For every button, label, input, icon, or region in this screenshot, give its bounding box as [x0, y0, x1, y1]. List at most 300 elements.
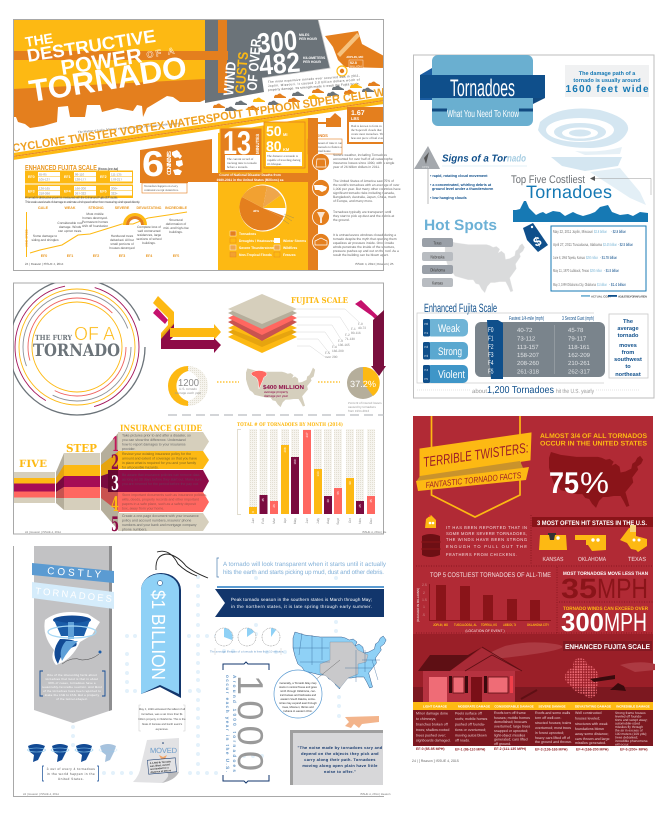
bar chart title: TOTAL # OF TORNADOES BY MONTH (2014) [237, 422, 343, 428]
dashed divider [168, 414, 384, 416]
footer fact: 1200 tornadoes: 1,200 Tornadoes [487, 385, 554, 396]
EF speed labels: EF-2 (111-135 MPH) [494, 747, 526, 751]
leader lines and scale labels: over 200 [325, 355, 338, 359]
leader lines and scale labels: F-0 [358, 322, 363, 326]
step 1 arrow [112, 432, 209, 456]
bar chart: tornadoes by month: July [316, 518, 320, 524]
step 4 arrow: 4 [111, 492, 119, 516]
damage descriptions: in forest uprooted; [535, 731, 564, 735]
bar chart: tornadoes by month: Oct [348, 518, 352, 523]
box: costliest list: $250 million [586, 255, 598, 260]
table: wind speeds [475, 316, 605, 379]
map: Missouri with Joplin callout [325, 31, 384, 76]
donut: 1200 tornadoes [168, 366, 208, 406]
sidebar text: It is untrue/severe windows closed during a [333, 233, 396, 237]
list: signs: • rapid, rotating cloud movement [430, 174, 488, 178]
heading: top five costliest tornadoes: Tornadoes [526, 182, 612, 202]
bar chart: tornadoes by month: Apr [283, 517, 287, 523]
pie legend: Tornadoes [239, 232, 256, 236]
label: five: FIVE [19, 459, 47, 470]
warning sign icon: warning [422, 166, 429, 168]
title: OF A [146, 46, 175, 60]
bar chart: tornadoes by month: Mar [272, 517, 276, 524]
scene: house and tree [413, 634, 655, 702]
banner: peak tornado season [215, 586, 384, 617]
step 1 arrow: you can show the difference. Understand [122, 438, 186, 442]
text: chickens: SOME MORE SEVERE TORNADOES, [446, 531, 527, 536]
wind gusts rotated text: OF OVER [244, 38, 264, 91]
pills: weak strong violent: Strong [438, 346, 462, 358]
page footers [25, 530, 387, 534]
list: signs: • low hanging clouds [430, 196, 467, 200]
ribbon: costly: COSTLY [47, 566, 102, 581]
title banner: What You Need To Know [447, 109, 520, 120]
box: costliest list: $1 billion [597, 282, 607, 287]
bar chart: tornadoes by month: 180 [293, 459, 297, 465]
heading: top five costliest tornadoes: Top Five Costliest [511, 174, 585, 186]
bar chart: top 5 costliest: 2.5 [422, 583, 427, 587]
line chart: wind speed by EF rating: debarked. All but [110, 238, 134, 242]
bar chart: tornadoes by month: Jun [305, 518, 309, 523]
title: the fury of a tornado: TORNADO [33, 341, 120, 361]
wind speed figures: PER HOUR [303, 60, 321, 64]
down arrow [355, 300, 386, 376]
icon: moved notice [133, 738, 179, 783]
sidebar text [333, 153, 401, 257]
text block in bookmark: of the tunnel-shaped. [56, 697, 88, 701]
pills: weak strong violent: F1 [424, 331, 428, 335]
text block in bookmark: of the tornadoes have been reported to [43, 689, 101, 693]
clocks: The average lifespan of a tornado is less than 10 minutes. [210, 650, 284, 654]
callout circle: tornado alley: starts in central Texas and goes [279, 686, 318, 689]
step 1 arrow: how to report damages to your insurance [122, 442, 186, 446]
table: wind speeds: F2 [488, 344, 494, 351]
tornado swirl illustration [538, 108, 646, 205]
banner: natural disaster deaths [217, 173, 284, 182]
box: costliest list: - $2.8 billion [611, 229, 626, 234]
table: EF wind speed boxes: 105-137 [39, 178, 50, 182]
buttons: hot spot states: Texas [434, 240, 442, 246]
text block in bookmark: One of the interesting facts about [47, 673, 97, 677]
callout circle: tornado alley: times may expand east through [279, 702, 317, 705]
figure: 1000 tornadoes: occur each year in the U.S. [225, 675, 230, 772]
footer fact: 1200 tornadoes [417, 385, 640, 396]
text: most expensive tornado: property damage. Its strength made it reach the Fujita Scale. [268, 82, 360, 92]
leader lines and scale labels: F-3 [338, 339, 343, 343]
box: average direction: average [617, 326, 639, 332]
quote box: noise to offer." [324, 769, 356, 774]
step 4 arrow [111, 492, 209, 516]
line chart: wind speed by EF rating: well constructed [138, 229, 161, 233]
table: wind speeds: 261-318 [517, 368, 540, 376]
skyline [513, 201, 648, 222]
callout circle: tornado alley: tral Kansas and Nebraska and [280, 694, 317, 697]
line chart: wind speed by EF rating: STRONG [88, 206, 104, 210]
pie: 37.2 percent: caused by tornadoes [348, 405, 376, 409]
sidebar text: year of 26 billion dollars in 2011. [333, 165, 380, 169]
icon: chicken in barrel [421, 514, 441, 557]
box: costliest list: April 27, 2011 Tuscaloosa, Alabama [553, 242, 602, 247]
caption: Joplin: The Skyline of Joplin, Missouri stands with the most destructive tornado in history [78, 121, 181, 134]
line chart: wind speed by EF rating: GALE [38, 206, 49, 210]
damage descriptions: houses; mobile homes [494, 716, 530, 720]
line chart: wind speed by EF rating: EF4 [146, 254, 152, 258]
line chart: wind speed by EF rating: sections of school [136, 237, 162, 241]
fact: damage path: tornado is usually around [573, 78, 641, 84]
step 5 arrow: 5 [111, 512, 119, 536]
damage descriptions: trees pushed over; [416, 734, 446, 738]
map: 75 percent: 75 [549, 467, 579, 500]
table: EF wind speed boxes: EF1 [64, 175, 71, 179]
pie legend [230, 231, 306, 257]
line chart: wind speed by EF rating: EF2 [93, 254, 99, 258]
heading: hot spots: Hot Spots [424, 217, 497, 234]
text: chickens: ENOUGH TO PULL OUT THE [446, 544, 527, 549]
line chart: wind speed by EF rating: damage. Winds [59, 225, 81, 229]
sidebar text: accounted for over half of all catastrophe [333, 157, 393, 161]
table: EF wind speed boxes: EF5 [100, 190, 107, 194]
block: 1.67 lbs hail: LBS [351, 116, 359, 121]
note: May 3 1999: tornadoes, was a set more than $1 [141, 713, 183, 716]
damage descriptions: foundations blown [575, 727, 604, 731]
damage descriptions: trees debarked; [615, 736, 638, 740]
fact: 35 MPH: 35 [561, 573, 597, 604]
title: the fury of a tornado [33, 324, 120, 361]
bar chart: tornadoes by month: 9 [251, 511, 255, 513]
sidebar text: insurance losses since 1990, with a single [333, 161, 395, 165]
footer: 24 | [ Reason ] ISSUE 4, 2015 [412, 759, 459, 763]
sidebar text: The United States of America saw 75% of [333, 179, 394, 183]
block: 50 MI 80 KM: 80 [266, 138, 282, 154]
pie legend: Wildfires [283, 246, 297, 250]
block: 50 MI 80 KM: MI [283, 132, 287, 137]
strip: damage categories: MODERATE DAMAGE [458, 704, 490, 708]
box: costliest list: - $1.5 billion [604, 268, 619, 273]
map: United States tornado alley [293, 632, 386, 694]
text: chickens: FEATHERS FROM CHICKENS. [446, 552, 517, 557]
line chart: wind speed by EF rating: small portions of [110, 242, 134, 246]
label: step: STEP [66, 442, 97, 455]
quote box: "The noise made by tornadoes vary and [298, 745, 383, 750]
heading: signs of a tornado: nado [507, 154, 526, 164]
tag: 1 billion: $1 BILLION [147, 590, 168, 680]
table: wind speeds: 40-72 [517, 327, 533, 334]
bar chart: tornadoes by month: May [293, 518, 297, 524]
leader lines and scale labels: 71-130 [345, 337, 355, 341]
bar chart: tornadoes by month: Feb [261, 518, 265, 524]
block: 4 seconds with house icon [308, 113, 342, 154]
fact: 300 MPH: TORNADO WINDS CAN EXCEED OVER [563, 606, 648, 612]
figure: 1000 tornadoes: Around 1000 tornadoes [232, 675, 237, 772]
buttons: hot spot states [422, 238, 453, 287]
pie: 37.2 percent [347, 367, 382, 413]
panel: costly tornadoes [14, 546, 391, 797]
tag: 1 billion [141, 551, 208, 698]
line chart: wind speed by EF rating: DEVASTATING [137, 206, 162, 210]
damage descriptions: cars thrown and large [575, 737, 610, 741]
step 3 arrow: Be aware that insurance policies can remove data [122, 473, 199, 477]
block: 50 MI 80 KM: capable of traveling during [267, 158, 301, 162]
damage descriptions: trees; shallow-rooted [416, 728, 449, 732]
box outline [417, 313, 604, 383]
map: hot spots US [445, 240, 525, 293]
box: costliest list: - $1.78 billion [600, 255, 617, 260]
page footers: ISSUE 4, 2014 | Re [362, 530, 387, 534]
block: 4 seconds with house icon: take a tornado to flatten a [310, 145, 342, 149]
block: 13 minutes: before a tornado. [227, 165, 248, 169]
pie legend: Droughts / Heatwaves [239, 239, 275, 243]
text: 3 out of every 4: in the world happen in the [47, 772, 95, 776]
table: EF wind speed boxes: 322+ [111, 192, 118, 196]
bar chart: top 5 costliest: TOP 5 COSTLIEST TORNADOES OF ALL-TIME [430, 572, 551, 579]
bar chart: tornadoes by month: 99 [348, 481, 352, 485]
table: EF wind speed boxes: EF4 [64, 190, 71, 194]
headline: three quarters [540, 433, 648, 448]
damage descriptions: missiles generated. [575, 741, 606, 745]
wind speed figures: 300 [256, 25, 298, 59]
table: wind speeds: 158-207 [517, 352, 540, 359]
box: costliest list: May 11, 1970 Lubbock, Texas [553, 268, 589, 273]
icon: price tag: $ [531, 233, 544, 250]
table: EF wind speed boxes: 111-135 [111, 172, 122, 176]
donut: 1200 tornadoes: 1200 [178, 378, 199, 389]
block: 50 MI 80 KM: KM [283, 147, 290, 152]
pills: weak strong violent: F3 [424, 354, 428, 358]
dotted dividers [416, 515, 653, 635]
EF speed labels [416, 747, 648, 752]
banner frame [432, 416, 520, 517]
text: fujita description: This scale uses levels of damage to estimate wind speed rather than measuring wind speed directly. [25, 200, 140, 204]
damage descriptions: Peels surface off [455, 712, 482, 716]
block: 6 continents: 6 [142, 143, 164, 184]
callout circle: tornado alley: north through Oklahoma, cen- [280, 690, 316, 693]
block: 50 MI 80 KM: The distance a tornado is [267, 154, 299, 158]
line chart: wind speed by EF rating: houses destroyed [109, 246, 135, 250]
row of small cloud icons [213, 82, 380, 111]
dotted connector [217, 381, 239, 383]
step 1 arrow: 1 [112, 432, 119, 456]
step 5 arrow: Create a one-page document with your insurance [122, 514, 199, 518]
bar chart: tornadoes by month: 26 [272, 504, 276, 508]
pie: 37.2 percent: Percent of insured losses [348, 401, 382, 405]
pills: weak strong violent: Weak [438, 323, 460, 335]
map: Missouri with Joplin callout: BILLION [350, 64, 362, 68]
state: Kansas [539, 533, 567, 563]
pills: weak strong violent: Violent [438, 369, 465, 381]
tree blown over [565, 658, 626, 698]
table: wind speeds: F3 [488, 352, 494, 359]
note: May 3 1999: expensive. [156, 728, 169, 731]
pie: 37.2 percent: from 1994-2013 [348, 409, 370, 413]
concentric rings title graphic [9, 279, 145, 415]
ribbon: tornadoes [32, 582, 114, 609]
footer fact: 1200 tornadoes: hit the U.S. yearly [556, 388, 594, 395]
step 2 arrow: 2 [111, 450, 119, 474]
map: $400 million: $400 MILLION [263, 384, 304, 391]
sidebar text: result the building can be blown apart. [333, 253, 389, 257]
box: costliest list: June 8, 1966 Topeka, Kansas [553, 255, 585, 260]
ribbon: costly [32, 563, 114, 583]
wind speed figures: KILOMETERS [303, 56, 326, 60]
title banner: Tornadoes [450, 75, 515, 102]
line chart: wind speed by EF rating: deformation of [166, 222, 186, 226]
step 2 arrow: in place what is required for you and your family [122, 461, 196, 465]
table: wind speeds: F0 [488, 327, 494, 334]
table: EF wind speed boxes: 166-200 [75, 186, 86, 190]
damage descriptions [413, 710, 653, 746]
step 4 arrow: box, away from your home. [122, 506, 164, 510]
leader lines and scale labels: F-2 [345, 333, 350, 337]
damage descriptions: tions and swept away; [615, 718, 648, 722]
map: Missouri with Joplin callout: $2.8 [350, 61, 357, 65]
heading: fujita scale: FUJITA SCALE [291, 295, 348, 305]
damage descriptions: automobile-sized [615, 722, 640, 726]
EF speed labels: EF-0 (65-85 MPH) [416, 747, 445, 751]
figure: 1000 tornadoes: 1000 [230, 675, 271, 771]
bar chart: tornadoes by month [238, 429, 375, 525]
step 1 arrow: Take pictures prior to and after a disaster, so [122, 434, 191, 438]
line chart: wind speed by EF rating: SEVERE [115, 206, 130, 210]
ribbon: title: FANTASTIC TORNADO FACTS [425, 470, 522, 490]
line chart: wind speed by EF rating: Complete loss of [137, 225, 161, 229]
text: fujita description [25, 196, 140, 204]
heading: signs of a tornado: Signs of a Tor [442, 154, 508, 164]
pie legend: Non-Tropical Floods [239, 253, 272, 257]
line chart: wind speed by EF rating: EF0 [41, 254, 47, 258]
damage descriptions: demolished; boxcars [494, 720, 527, 724]
bar chart: top 5 costliest: OKLAHOMA CITY [527, 623, 549, 627]
block: 4 seconds with house icon: residential home. [310, 149, 332, 153]
fact: 35 MPH: MPH [597, 573, 648, 604]
block: 6 continents [140, 139, 308, 193]
bar chart: tornadoes by month: Jan [251, 518, 255, 523]
sidebar text: equalizes air pressure inside. Once inside [333, 241, 394, 245]
icon: pointing hand [345, 716, 379, 728]
header: 3 most hit states [532, 517, 653, 527]
buttons: hot spot states: Nebraska [430, 254, 445, 260]
note: May 3 1999: billion property in Oklahoma. This is the [138, 718, 186, 721]
box: costliest list: May 3, 1999 Oklahoma City, Oklahoma [553, 282, 596, 287]
line chart: wind speed by EF rating: EF5 [173, 254, 179, 258]
map: Missouri with Joplin callout: JOPLIN, MO [346, 55, 364, 59]
line chart: wind speed by EF rating: Most mobile [86, 212, 104, 216]
label: enhanced fujita scale [563, 641, 652, 651]
pie: 37.2 percent: 37.2% [350, 379, 376, 389]
box: average direction: The [623, 318, 633, 325]
state: Texas [620, 525, 647, 563]
title: THE [24, 30, 54, 50]
bar chart: tornadoes by month: Aug [326, 518, 330, 524]
box: costliest list: $250 million [590, 268, 602, 273]
box: costliest list: $2.45 billion [603, 242, 617, 247]
step 3 arrow: 3 [111, 471, 119, 495]
insurance guide heading: INSURANCE GUIDE [120, 424, 202, 434]
line chart: wind speed by EF rating: siding and shingles [31, 238, 59, 242]
bar chart: tornadoes by month: Dec [369, 518, 373, 524]
text: transparent tornado: hits the earth and starts picking up mud, dust and other debris. [223, 569, 384, 576]
line chart: wind speed by EF rating: buildings. [169, 230, 183, 234]
damage descriptions: Well constructed [575, 711, 602, 715]
icon: moved notice: A 1,900-lb Tornado [150, 760, 172, 765]
damage descriptions: overturned; most trees [535, 726, 571, 730]
sidebar text: the world's tornadoes with an average of over [333, 183, 400, 187]
icon: moved notice: was lifted, moved [150, 763, 171, 768]
wind speed figures: 482 [258, 47, 301, 81]
bar chart: top 5 costliest [416, 572, 551, 633]
footer: 24 | Reason | ISSUE 4, 2014 [23, 792, 59, 796]
list: signs [430, 174, 494, 200]
block: 6 continents: Tornadoes happen on every [144, 184, 179, 188]
damage descriptions: tions or overturned; [455, 728, 486, 732]
block: 13 minutes: MINUTES [255, 134, 260, 154]
pills: weak strong violent: F5 [424, 377, 428, 381]
pie legend: Freezes [283, 253, 296, 257]
block: 6 continents: CONTINENTS [166, 151, 173, 175]
house [418, 647, 537, 702]
pills: weak strong violent: F4 [424, 368, 428, 372]
box: costliest list: $2.8 billion [594, 229, 607, 234]
bar chart: top 5 costliest: 1 [423, 605, 425, 609]
pills: weak strong violent [423, 319, 468, 383]
icon: moved notice: distance of 200 mi [150, 769, 172, 774]
bar chart: top 5 costliest: 1.5 [422, 598, 427, 602]
state: Texas: TEXAS [628, 556, 646, 563]
strip: damage categories: SEVERE DAMAGE [538, 704, 566, 708]
damage descriptions: branches broken off [416, 722, 448, 726]
panel: destructive power of a tornado [12, 19, 401, 271]
chevron arrows [153, 296, 221, 353]
map: $400 million: average property [264, 390, 289, 394]
bar chart: tornadoes by month: 237 [305, 432, 309, 438]
panel: terrible twisters [412, 416, 655, 763]
quote box: moving along open plain have little [302, 763, 378, 768]
table: EF wind speed boxes: 200+ [111, 186, 118, 190]
header: yellow and orange slanted background [13, 19, 228, 165]
icon: tornado [44, 612, 102, 665]
block: 13 minutes: The current record of [227, 157, 254, 161]
leader lines and scale labels [297, 309, 366, 359]
damage descriptions: the air in excess of [615, 728, 643, 732]
clocks [210, 628, 284, 655]
state: Oklahoma: OKLAHOMA [578, 556, 606, 563]
callout circle: tornado alley: Iowa, Missouri, Illinois and [282, 706, 314, 709]
box: costliest list: May 22, 2011 Joplin, Missouri [553, 229, 593, 234]
text block in bookmark: reasonably-favorable reaction. And Most [42, 685, 102, 689]
damage descriptions: away some distance; [575, 732, 609, 736]
banner: natural disaster deaths: Count of National Disaster Deaths from [219, 173, 281, 177]
line chart: wind speed by EF rating: buildings. [142, 241, 156, 245]
text block in bookmark: 90% of cases, tornadoes have a [48, 681, 96, 685]
step 4 arrow: papers in a safe place, such as a safety deposit [122, 502, 196, 506]
damage descriptions: pushed off founda- [455, 722, 486, 726]
table: wind speeds: 79-117 [568, 336, 587, 342]
damage descriptions: overturned; large trees [494, 724, 530, 728]
quote box: carry along their path. Tornadoes [304, 757, 376, 762]
callout circle: tornado alley: Generally, a Tornado Alley map [279, 682, 317, 685]
header: 3 most hit states: 3 MOST OFTEN HIT STATES IN THE U.S. [537, 520, 647, 527]
pie legend: Winter Storms [283, 239, 306, 243]
icon: moved notice: MOVED [150, 746, 178, 755]
warning sign icon [414, 146, 440, 204]
leader lines and scale labels: 166-200 [332, 349, 344, 353]
bar chart: top 5 costliest: (DAMAGE IN BILLIONS) [416, 588, 420, 622]
table: EF wind speed boxes: 178-217 [111, 178, 122, 182]
bar chart: tornadoes by month: 35 [369, 499, 373, 503]
bar chart: top 5 costliest: (LOCATION OF EVENT ) [465, 629, 505, 633]
line chart: wind speed by EF rating: can uproot trees. [58, 229, 82, 233]
leader lines and scale labels: 80-116 [351, 331, 361, 335]
damage descriptions: Roofs and some walls [535, 711, 570, 715]
